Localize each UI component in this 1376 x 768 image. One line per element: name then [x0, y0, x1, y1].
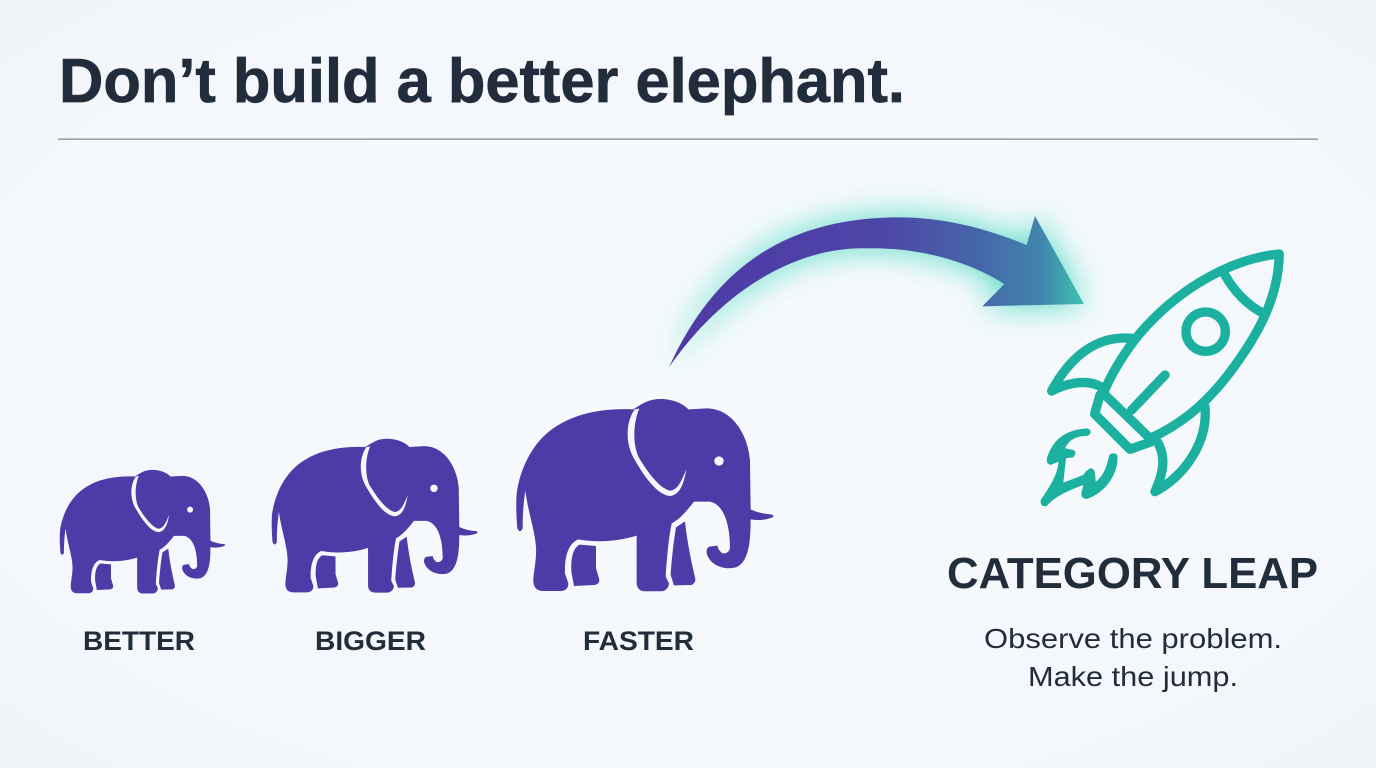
label: bigger: BIGGER [315, 626, 426, 656]
label: better: BETTER [83, 626, 195, 656]
heading: category leap: CATEGORY LEAP [947, 549, 1318, 598]
text: call to action: Make the jump. [1028, 661, 1238, 692]
title: Don’t build a better elephant. [59, 47, 905, 116]
arrow: leap from elephant to rocket [669, 216, 1084, 367]
elephant: faster [516, 399, 773, 656]
text: call to action: Observe the problem. [984, 623, 1282, 654]
label: faster: FASTER [583, 626, 694, 656]
icon: rocket [1041, 254, 1279, 506]
elephant: better [60, 470, 225, 656]
elephant: bigger [272, 439, 477, 656]
text: call to action [984, 623, 1282, 692]
